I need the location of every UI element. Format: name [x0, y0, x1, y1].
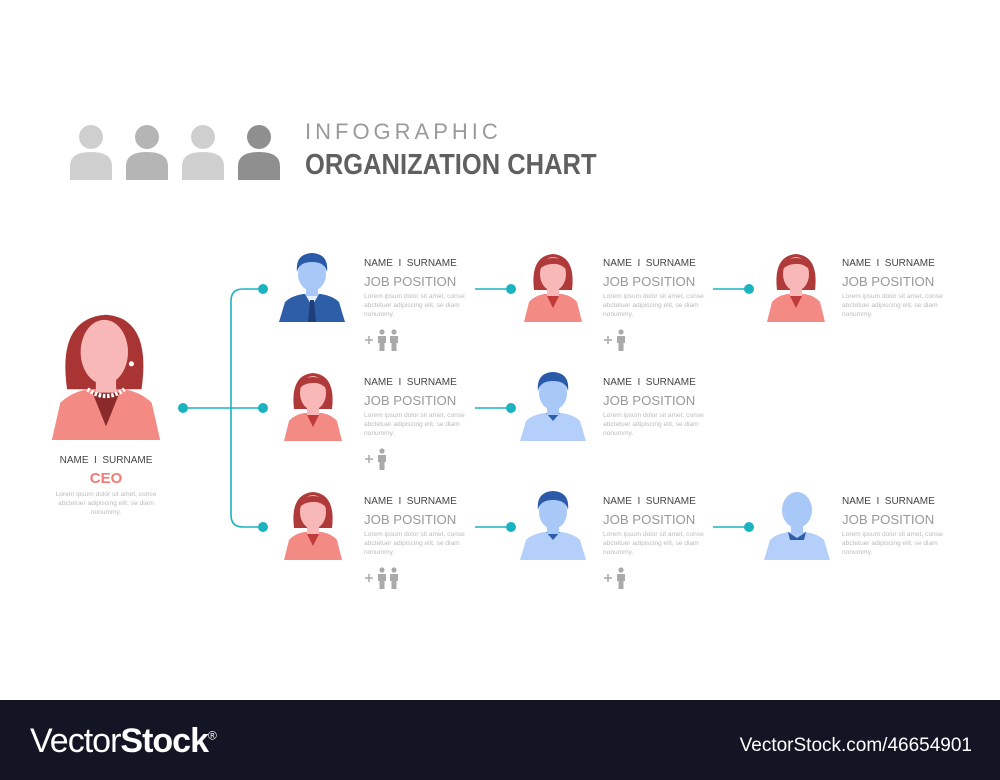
row 1 col 1	[279, 253, 345, 322]
CEO	[52, 314, 160, 516]
card r1c3: JOB POSITION	[842, 274, 934, 289]
card r2c2: JOB POSITION	[603, 393, 695, 408]
title	[305, 119, 597, 181]
title: INFOGRAPHIC	[305, 119, 502, 144]
card r3c1: JOB POSITION	[364, 512, 456, 527]
card r1c2: NAME I SURNAME	[603, 258, 696, 269]
CEO: NAME I SURNAME	[60, 455, 152, 466]
card r1c3	[842, 258, 943, 318]
row 1 col 2	[524, 254, 582, 322]
row 1 col 3	[767, 254, 825, 322]
footer	[0, 700, 1000, 780]
card r1c1: NAME I SURNAME	[364, 258, 457, 269]
card r1c3: Lorem ipsum dolor sit amet, conse abctetuer adipiscing elit, se diam nonummy.	[842, 293, 943, 318]
card r2c2: Lorem ipsum dolor sit amet, conse abctetuer adipiscing elit, se diam nonummy.	[603, 412, 704, 437]
card r1c2: JOB POSITION	[603, 274, 695, 289]
card r3c1: Lorem ipsum dolor sit amet, conse abctetuer adipiscing elit, se diam nonummy.	[364, 531, 465, 556]
row 3 col 3	[764, 492, 830, 560]
footer: VectorStock®	[30, 722, 216, 760]
card r3c3: NAME I SURNAME	[842, 496, 935, 507]
card r2c1: NAME I SURNAME	[364, 377, 457, 388]
title: ORGANIZATION CHART	[305, 149, 597, 181]
card r3c2: Lorem ipsum dolor sit amet, conse abctetuer adipiscing elit, se diam nonummy.	[603, 531, 704, 556]
card r3c3: JOB POSITION	[842, 512, 934, 527]
card r1c1: JOB POSITION	[364, 274, 456, 289]
card r1c3: NAME I SURNAME	[842, 258, 935, 269]
card r2c1	[364, 377, 465, 470]
card r3c3: Lorem ipsum dolor sit amet, conse abctetuer adipiscing elit, se diam nonummy.	[842, 531, 943, 556]
card r1c1	[364, 258, 465, 351]
card r1c1: Lorem ipsum dolor sit amet, conse abctetuer adipiscing elit, se diam nonummy.	[364, 293, 465, 318]
card r2c1: Lorem ipsum dolor sit amet, conse abctetuer adipiscing elit, se diam nonummy.	[364, 412, 465, 437]
card r3c1	[364, 496, 465, 589]
card r1c2: Lorem ipsum dolor sit amet, conse abctetuer adipiscing elit, se diam nonummy.	[603, 293, 704, 318]
row 2 col 2	[520, 372, 586, 441]
card r3c1: NAME I SURNAME	[364, 496, 457, 507]
card r2c2	[603, 377, 704, 437]
card r3c3	[842, 496, 943, 556]
card r3c2: NAME I SURNAME	[603, 496, 696, 507]
row 3 col 1	[284, 492, 342, 560]
CEO: Lorem ipsum dolor sit amet, conse abctetuer adipiscing elit, se diam nonummy.	[56, 491, 156, 516]
card r2c2: NAME I SURNAME	[603, 377, 696, 388]
header icons	[70, 125, 280, 180]
card r3c2: JOB POSITION	[603, 512, 695, 527]
row 3 col 2	[520, 491, 586, 560]
card r3c2	[603, 496, 704, 589]
footer: VectorStock.com/46654901	[740, 735, 972, 756]
card r1c2	[603, 258, 704, 351]
row 2 col 1	[284, 373, 342, 441]
card r2c1: JOB POSITION	[364, 393, 456, 408]
CEO: CEO	[90, 470, 122, 487]
